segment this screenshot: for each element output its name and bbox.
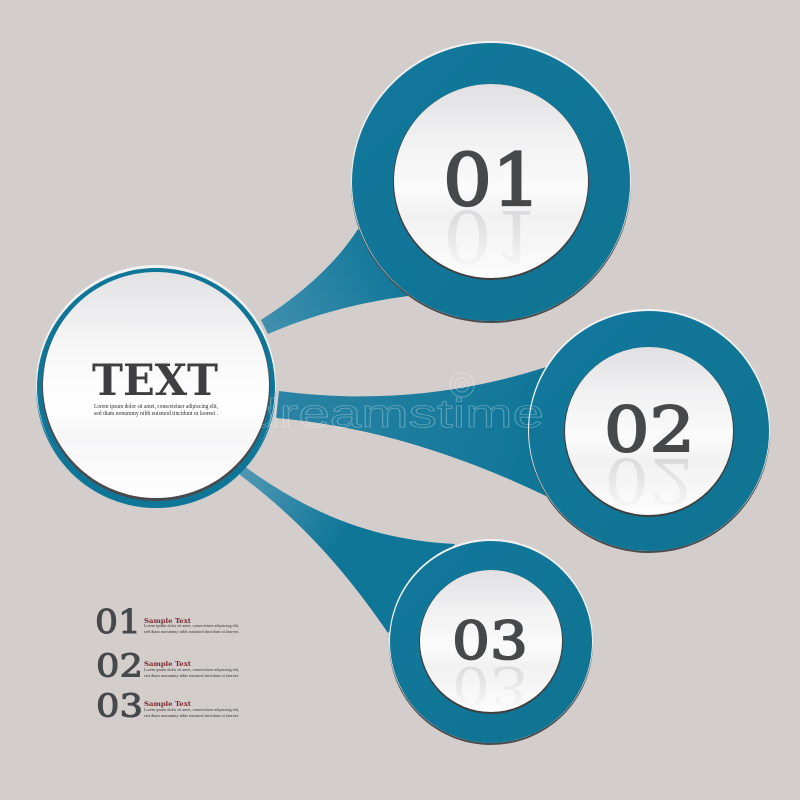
legend item 03	[96, 687, 239, 725]
legend item 02: 02	[96, 647, 143, 685]
central body text: sed diam nonummy nibh euismod tincidunt ut laoreet .	[94, 411, 218, 417]
circle 02	[528, 309, 770, 553]
connector: centre to 01	[261, 229, 408, 334]
central body text: Lorem ipsum dolor sit amet, consectetuer adipiscing elit,	[94, 404, 218, 410]
legend item 02	[96, 647, 239, 685]
legend item 03: Sample Text	[144, 700, 192, 708]
legend item 02: Sample Text	[144, 660, 192, 668]
legend item 03: 03	[96, 687, 143, 725]
circle 03	[389, 539, 593, 745]
legend item 03: sed diam nonummy nibh euismod tincidunt ut laoreet.	[144, 713, 239, 718]
legend item 03: Lorem ipsum dolor sit amet, consectetuer adipiscing elit,	[144, 707, 239, 713]
legend item 02: Lorem ipsum dolor sit amet, consectetuer adipiscing elit,	[144, 667, 239, 673]
legend item 01: sed diam nonummy nibh euismod tincidunt ut laoreet.	[144, 629, 239, 634]
connector: centre to 02	[276, 367, 546, 496]
legend item 01: Sample Text	[144, 617, 192, 625]
reflection 03: 03	[452, 654, 528, 714]
reflection 01: 01	[443, 194, 541, 278]
heading TEXT: TEXT	[92, 356, 218, 406]
central circle	[36, 265, 276, 508]
number 03: 03	[452, 612, 528, 672]
circle 01	[351, 41, 631, 323]
legend item 01: 01	[95, 602, 141, 641]
watermark	[248, 373, 544, 436]
connector: centre to 03	[240, 463, 455, 633]
legend item 01	[95, 602, 239, 641]
legend	[95, 602, 239, 725]
reflection 02: 02	[604, 444, 695, 517]
number 02: 02	[604, 393, 695, 466]
watermark: dreamstime	[248, 392, 544, 436]
number 01: 01	[443, 138, 541, 222]
central body text	[94, 404, 218, 417]
legend item 01: Lorem ipsum dolor sit amet, consectetuer adipiscing elit,	[144, 623, 239, 629]
legend item 02: sed diam nonummy nibh euismod tincidunt ut laoreet.	[144, 673, 239, 678]
